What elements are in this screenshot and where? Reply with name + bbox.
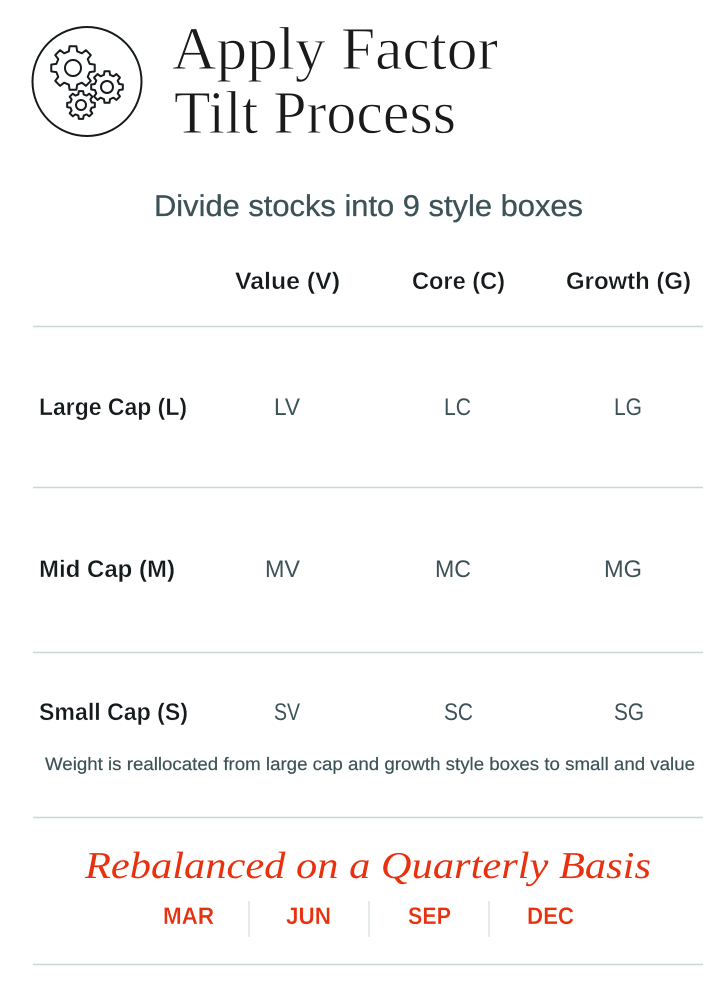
- row: small cap: SG: [614, 699, 644, 726]
- column headers: Core (C): [412, 268, 505, 295]
- rebalancing heading: Rebalanced on a Quarterly Basis: [84, 845, 651, 887]
- row: mid cap: MC: [435, 556, 471, 583]
- column headers: Growth (G): [566, 268, 691, 295]
- rebalancing months: SEP: [408, 903, 451, 930]
- icon: gears in circle: [32, 27, 142, 136]
- row: large cap: LG: [614, 394, 642, 421]
- rebalancing months: DEC: [527, 903, 574, 930]
- row: small cap: SV: [274, 699, 300, 726]
- rebalancing months: [163, 901, 574, 937]
- row: large cap: LC: [444, 394, 471, 421]
- row: mid cap: [39, 556, 642, 583]
- note on weight reallocation: Weight is reallocated from large cap and growth style boxes to small and value: [45, 754, 695, 774]
- row: large cap: [39, 394, 642, 421]
- rebalancing months: JUN: [286, 903, 331, 930]
- row: large cap: LV: [274, 394, 300, 421]
- row: small cap: [39, 699, 644, 726]
- subtitle: Divide stocks into 9 style boxes: [154, 190, 583, 223]
- row: mid cap: MG: [604, 556, 642, 583]
- row: small cap: SC: [444, 699, 473, 726]
- title: Tilt Process: [174, 80, 456, 147]
- rebalancing months: MAR: [163, 903, 214, 930]
- row: mid cap: MV: [265, 556, 300, 583]
- row: mid cap: Mid Cap (M): [39, 556, 175, 583]
- title: Apply Factor: [172, 16, 498, 83]
- row: small cap: Small Cap (S): [39, 699, 188, 726]
- title: [172, 16, 498, 147]
- column headers: [235, 268, 691, 295]
- column headers: Value (V): [235, 268, 340, 295]
- row: large cap: Large Cap (L): [39, 394, 187, 421]
